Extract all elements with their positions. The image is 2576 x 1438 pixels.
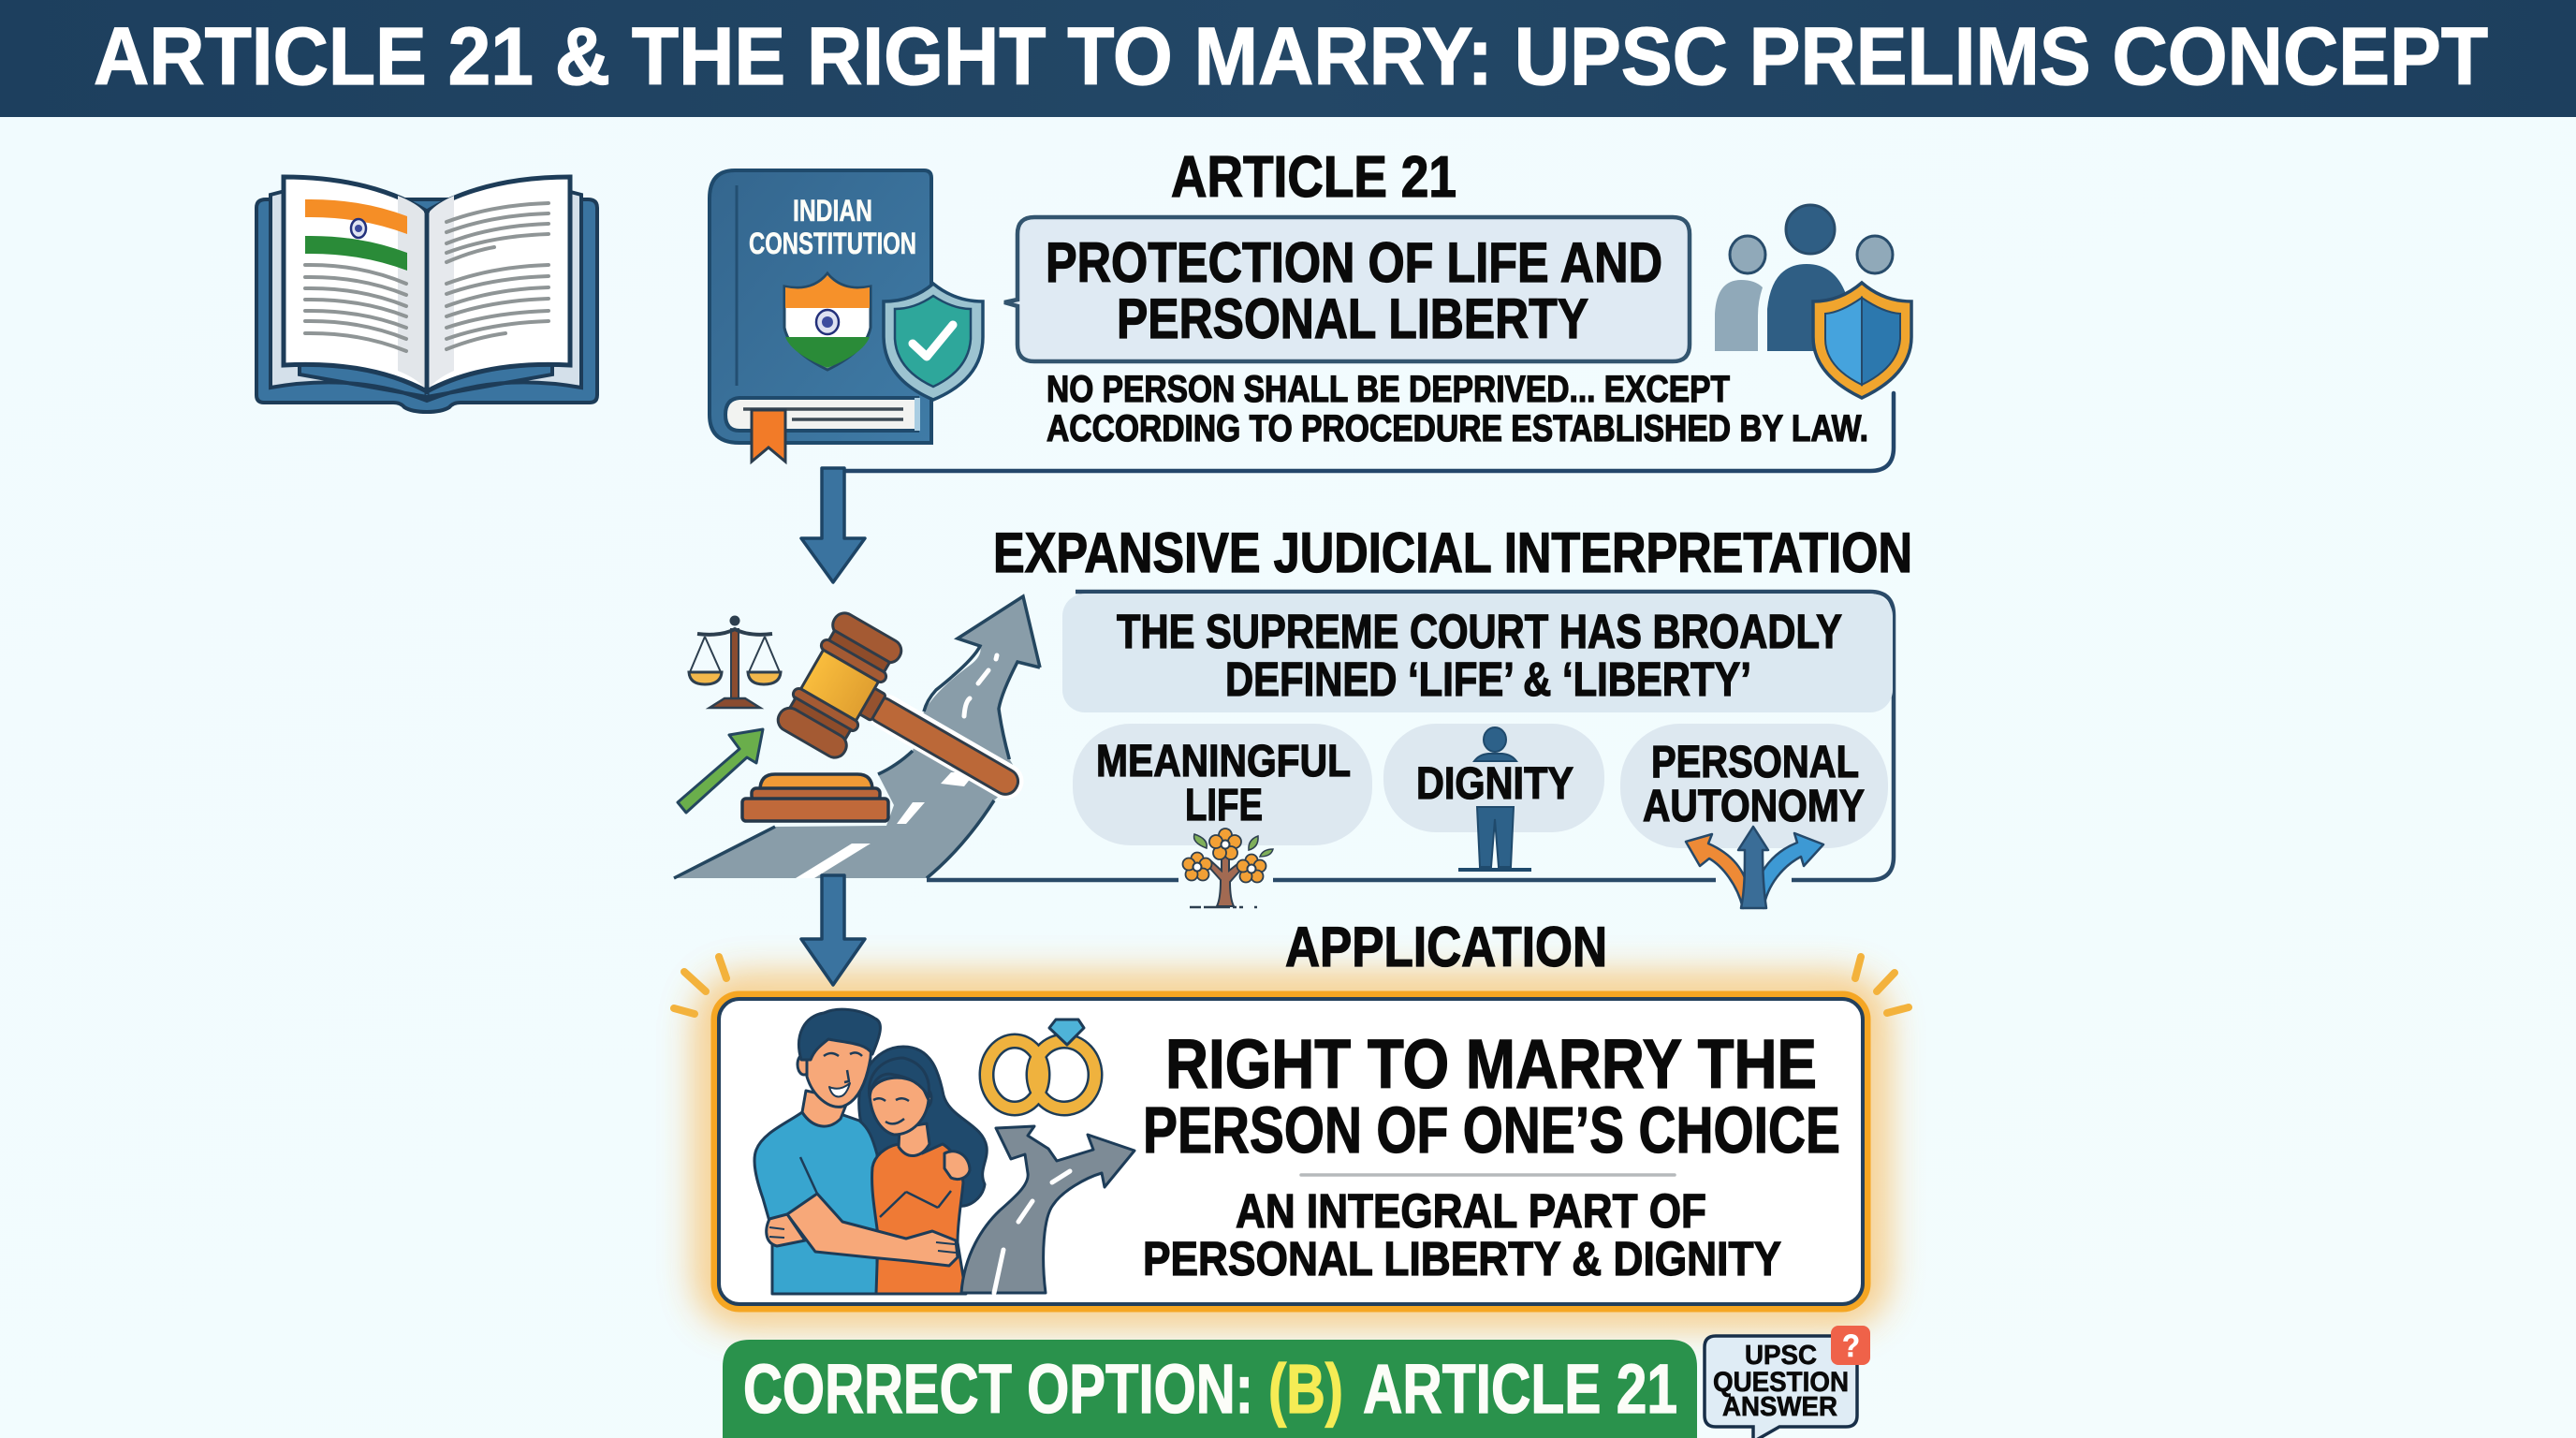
- text block: right to marry: AN INTEGRAL PART OF: [1236, 1184, 1706, 1238]
- icon: open book with Indian flag: [256, 177, 597, 412]
- panel: application highlight box: [674, 957, 1909, 1309]
- arrow: interpretation to application: [801, 875, 865, 985]
- icon: Indian Constitution book: [710, 170, 983, 462]
- pill: meaningful life: LIFE: [1185, 781, 1263, 830]
- pill: dignity: [1383, 724, 1604, 870]
- pill: dignity: DIGNITY: [1416, 759, 1573, 809]
- text block: right to marry: RIGHT TO MARRY THE: [1165, 1025, 1817, 1103]
- icon: embracing couple: [754, 1009, 987, 1294]
- panel: supreme court statement: THE SUPREME COURT HAS BROADLY: [1117, 605, 1842, 658]
- icon: wedding rings: [987, 1020, 1095, 1108]
- pill: meaningful life: [1073, 724, 1372, 845]
- icon: Indian Constitution book: CONSTITUTION: [749, 227, 916, 260]
- icon: teal check shield: [884, 284, 983, 400]
- callout: protection of life and personal liberty: PERSONAL LIBERTY: [1117, 287, 1588, 350]
- pill: meaningful life: MEANINGFUL: [1096, 737, 1351, 786]
- decorative rays: highlight sparks: [674, 957, 1909, 1014]
- icon: flag shield: [784, 273, 871, 370]
- heading: application: APPLICATION: [1285, 916, 1607, 978]
- arrow: article 21 to interpretation: [801, 468, 865, 582]
- text block: right to marry: PERSON OF ONE’S CHOICE: [1143, 1093, 1840, 1167]
- icon: road with arrow: [674, 596, 1040, 878]
- icon: forked road: [961, 1126, 1134, 1293]
- pill: personal autonomy: PERSONAL: [1651, 738, 1859, 787]
- panel: supreme court statement: DEFINED ‘LIFE’ & ‘LIBERTY’: [1225, 653, 1751, 706]
- heading: Article 21: ARTICLE 21: [1171, 145, 1456, 210]
- heading: expansive judicial interpretation: EXPANSIVE JUDICIAL INTERPRETATION: [993, 521, 1912, 584]
- text block: right to marry: PERSONAL LIBERTY & DIGNITY: [1143, 1232, 1781, 1285]
- icon: green growth arrow: [678, 729, 763, 813]
- badge: UPSC question answer: [1705, 1326, 1870, 1438]
- text block: right to marry: [1143, 1025, 1840, 1285]
- icon: question mark tag: ?: [1842, 1328, 1860, 1364]
- icon: people with shield: [1715, 205, 1911, 398]
- icon: flowering tree: [1183, 829, 1273, 907]
- pill: personal autonomy: [1620, 724, 1888, 848]
- callout: protection of life and personal liberty: PROTECTION OF LIFE AND: [1046, 231, 1662, 294]
- icon: sound block: [742, 774, 888, 821]
- banner: correct option: CORRECT OPTION:: [743, 1350, 1253, 1428]
- banner: correct option: [723, 1340, 1697, 1438]
- badge: UPSC question answer: QUESTION: [1713, 1367, 1849, 1398]
- callout: protection of life and personal liberty: [1004, 217, 1690, 361]
- banner: correct option: ARTICLE 21: [1363, 1350, 1677, 1428]
- badge: UPSC question answer: ANSWER: [1722, 1392, 1837, 1422]
- text block: article 21 wording: NO PERSON SHALL BE DEPRIVED... EXCEPT: [1046, 369, 1730, 410]
- icon: standing person: [1458, 727, 1531, 870]
- title banner: ARTICLE 21 & THE RIGHT TO MARRY: UPSC PRELIMS CONCEPT: [94, 11, 2488, 102]
- text block: article 21 wording: ACCORDING TO PROCEDURE ESTABLISHED BY LAW.: [1046, 408, 1868, 449]
- panel: supreme court statement: [1062, 594, 1893, 712]
- panel: judicial interpretation frame: [927, 592, 1894, 880]
- pill: personal autonomy: AUTONOMY: [1643, 782, 1865, 831]
- icon: question mark tag: [1831, 1326, 1870, 1365]
- text block: article 21 wording: [1046, 369, 1868, 449]
- icon: gavel: [774, 609, 1054, 847]
- banner: correct option: (B): [1268, 1350, 1343, 1428]
- badge: UPSC question answer: UPSC: [1745, 1341, 1817, 1371]
- icon: scales of justice: [689, 616, 781, 708]
- icon: diverging choice arrows: [1686, 827, 1823, 908]
- icon: Indian Constitution book: INDIAN: [793, 194, 872, 227]
